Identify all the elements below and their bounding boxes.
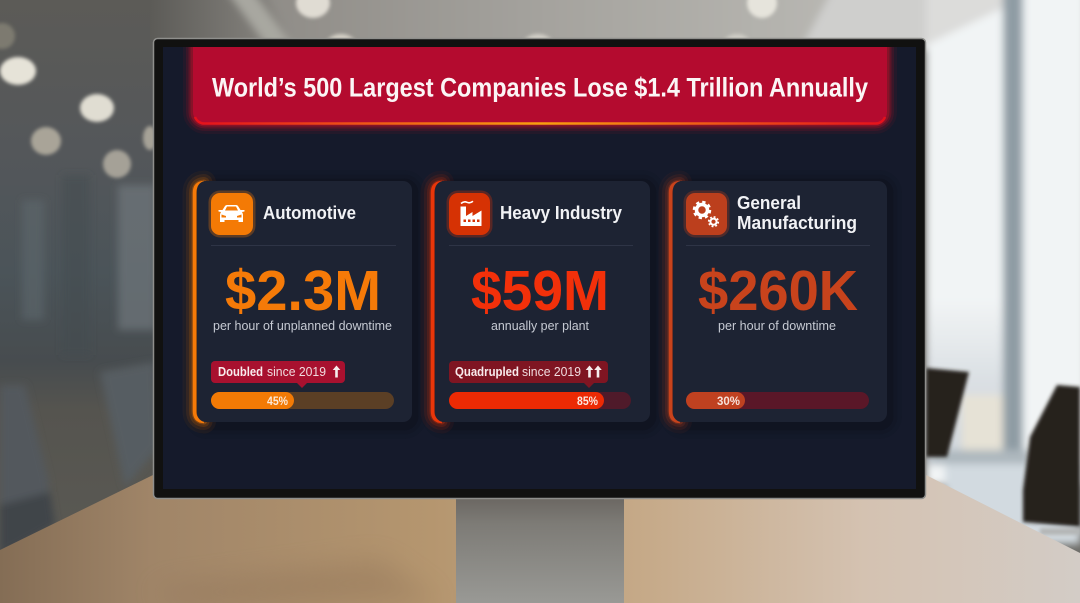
heading: Manufacturing xyxy=(737,213,857,233)
description: annually per plant xyxy=(491,318,589,333)
accent edge xyxy=(194,182,204,422)
accent edge xyxy=(670,182,680,422)
description: per hour of downtime xyxy=(718,318,836,333)
progress bar 85%: 85% xyxy=(577,394,598,408)
progress bar 85% xyxy=(449,392,631,409)
wooden table xyxy=(0,475,1080,603)
title: World’s 500 Largest Companies Lose $1.4 Trillion Annually xyxy=(212,72,868,102)
callout: quadrupled xyxy=(449,361,608,388)
callout: doubled xyxy=(211,361,345,388)
monitor stand xyxy=(456,497,624,603)
icon: factory xyxy=(449,193,490,235)
header banner xyxy=(193,47,887,124)
icon: gears xyxy=(686,193,727,235)
callout: doubled: since 2019 xyxy=(267,365,326,379)
figure: $59M xyxy=(471,259,609,323)
heading: Automotive xyxy=(263,203,356,223)
heading xyxy=(737,193,857,233)
callout: doubled: Doubled xyxy=(218,365,263,379)
panel: heavy industry xyxy=(432,181,652,426)
screen xyxy=(163,47,916,489)
callout: quadrupled: Quadrupled xyxy=(455,365,519,379)
panel: general manufacturing xyxy=(670,181,889,426)
bokeh ceiling lights xyxy=(0,0,777,178)
progress bar 45% xyxy=(211,392,394,409)
progress bar 30% xyxy=(686,392,869,409)
icon: car xyxy=(211,193,253,235)
monitor bezel xyxy=(154,38,926,498)
progress bar 45%: 45% xyxy=(267,394,288,408)
callout: quadrupled: since 2019 xyxy=(522,365,581,379)
monitor xyxy=(154,38,926,498)
figure: $260K xyxy=(698,259,858,323)
panel: automotive xyxy=(194,181,414,426)
accent edge xyxy=(432,182,442,422)
heading: Heavy Industry xyxy=(500,203,622,223)
description: per hour of unplanned downtime xyxy=(213,318,392,333)
heading: General xyxy=(737,193,801,213)
figure: $2.3M xyxy=(225,259,381,323)
progress bar 30%: 30% xyxy=(717,394,740,408)
